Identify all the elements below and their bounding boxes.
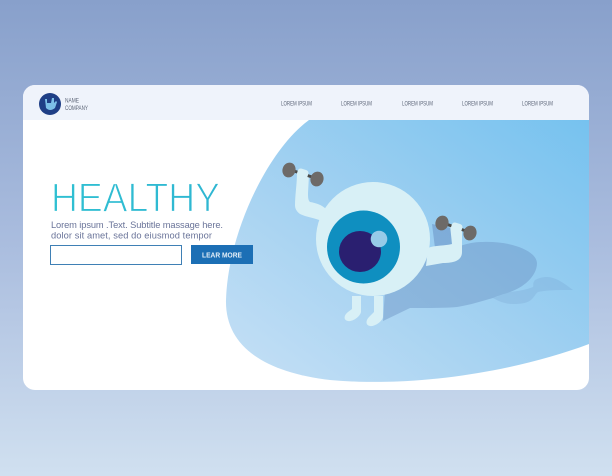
input box xyxy=(50,246,182,264)
eyeball xyxy=(316,182,430,296)
navigation menu: LOREM IPSUM xyxy=(522,100,553,108)
company name: NAME xyxy=(65,98,79,104)
navigation menu: LOREM IPSUM xyxy=(462,100,493,108)
panel: landing page card xyxy=(23,85,589,390)
navigation menu: LOREM IPSUM xyxy=(281,100,312,108)
button: learn more: LEAR MORE xyxy=(202,252,242,260)
right dumbbell xyxy=(434,214,478,242)
company name: COMPANY xyxy=(65,105,88,112)
navigation menu xyxy=(281,100,553,108)
button: learn more xyxy=(191,245,253,264)
blue curved hero shape xyxy=(226,120,589,382)
character: eyeball with dumbbells xyxy=(281,161,478,326)
subtitle text: dolor sit amet, sed do eiusmod tempor xyxy=(51,230,212,240)
navigation menu: LOREM IPSUM xyxy=(402,100,433,108)
navigation menu: LOREM IPSUM xyxy=(341,100,372,108)
logo xyxy=(39,93,61,115)
heading: HEALTHY xyxy=(51,174,220,220)
left dumbbell xyxy=(281,161,325,188)
right arm xyxy=(426,225,462,266)
pupil xyxy=(339,231,381,272)
iris xyxy=(327,210,400,284)
subtitle text: Lorem ipsum .Text. Subtitle massage here. xyxy=(51,220,223,230)
highlight xyxy=(371,231,387,247)
left arm xyxy=(295,172,326,221)
company name xyxy=(65,98,88,112)
shadow of character xyxy=(383,224,573,321)
legs xyxy=(345,296,383,326)
subtitle text xyxy=(51,220,223,240)
header bar xyxy=(23,85,589,120)
